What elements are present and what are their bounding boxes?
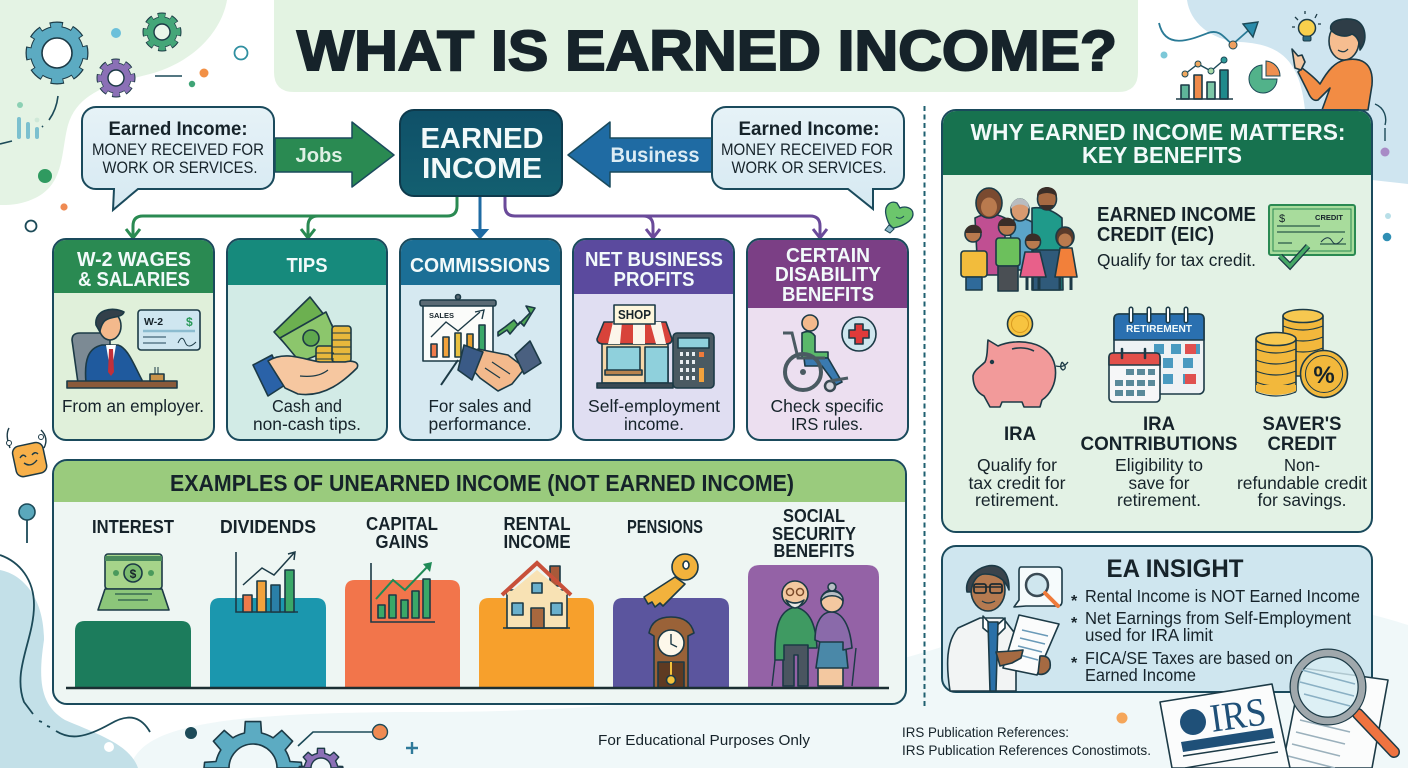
- benefit: saver's credit: CREDIT: [1268, 434, 1337, 455]
- card: commissions: performance.: [428, 414, 532, 434]
- bar: social security: SOCIAL: [783, 506, 845, 526]
- benefit: IRA: retirement.: [975, 490, 1059, 510]
- arrow: business: Business: [610, 144, 700, 167]
- bar: pensions: PENSIONS: [627, 517, 703, 537]
- benefit: saver's credit: [1237, 414, 1367, 510]
- icon: employee at desk: [67, 309, 177, 388]
- card: tips: Cash and: [272, 396, 342, 416]
- callout: right definition: MONEY RECEIVED FOR: [721, 140, 893, 159]
- card: certain disability benefits: Check specific: [770, 396, 884, 416]
- panel: unearned income: [53, 460, 906, 704]
- icon: house: [502, 563, 571, 628]
- bar: interest: INTEREST: [92, 517, 174, 537]
- bullet list: Net Earnings from Self-Employment: [1085, 608, 1351, 628]
- person: [1292, 19, 1372, 110]
- decoration: orange dot: [1116, 712, 1128, 724]
- icon: sales chart and handshake: [420, 294, 541, 391]
- bar: pensions: [613, 517, 729, 688]
- benefit: earned income credit: [1097, 204, 1256, 270]
- benefit: saver's credit: refundable credit: [1237, 473, 1367, 493]
- icon: document behind: [1282, 668, 1388, 768]
- bullet list: Earned Income: [1085, 665, 1196, 685]
- bar: dividends: DIVIDENDS: [220, 517, 316, 537]
- icon: bottom purple gear: [299, 748, 343, 768]
- icon: credit check: CREDIT: [1315, 213, 1343, 222]
- bullet list: *: [1071, 655, 1078, 672]
- heading: WHY EARNED INCOME MATTERS:: [970, 119, 1346, 145]
- illustration: presenter with charts: [1159, 11, 1391, 241]
- benefit: IRA contributions: IRA: [1143, 414, 1175, 435]
- central box: earned income: [400, 110, 562, 196]
- icon: W-2 form: $: [186, 315, 193, 329]
- icon: capital gains chart: [371, 562, 435, 622]
- icon: bottom blue gear: [204, 722, 302, 768]
- bar: rental income: [479, 514, 594, 688]
- card: W-2 wages: [53, 239, 214, 440]
- benefit: IRA: IRA: [1004, 424, 1036, 445]
- benefit: IRA contributions: CONTRIBUTIONS: [1080, 434, 1238, 455]
- icon: tax professional: [948, 566, 1059, 691]
- bar: social security: [748, 506, 879, 688]
- bar: rental income: RENTAL: [504, 514, 570, 534]
- callout: left definition: WORK OR SERVICES.: [102, 158, 258, 177]
- benefit: IRA: [968, 424, 1066, 510]
- card: net business profits: Self-employment: [588, 396, 720, 416]
- card: tips: TIPS: [286, 255, 328, 277]
- card: certain disability benefits: CERTAIN: [786, 245, 870, 267]
- central box: earned income: INCOME: [422, 153, 542, 185]
- icon: medical cross: [842, 317, 876, 351]
- benefit: saver's credit: for savings.: [1258, 490, 1346, 510]
- icon: laptop with money: $: [130, 567, 137, 581]
- footer note: For Educational Purposes Only: [598, 733, 811, 749]
- decorative curve: [0, 555, 150, 736]
- central box: earned income: EARNED: [420, 123, 544, 155]
- icon: elderly couple: [772, 581, 856, 686]
- bullet list: used for IRA limit: [1085, 625, 1213, 645]
- benefit: IRA: tax credit for: [968, 473, 1066, 493]
- bullet list: *: [1071, 593, 1078, 610]
- icon: pie chart: [1249, 61, 1280, 93]
- connectors: purple to profits and disability: [505, 197, 827, 238]
- card: W-2 wages: W-2 WAGES: [77, 249, 191, 271]
- benefit: IRA: Qualify for: [977, 455, 1057, 475]
- icon: light bulb: [1292, 11, 1321, 41]
- icon: trend arrow: [1159, 22, 1258, 58]
- divider: [924, 106, 926, 706]
- footer references: IRS Publication References Conostimots.: [902, 742, 1151, 758]
- icon: credit check: $: [1279, 213, 1285, 225]
- card: W-2 wages: & SALARIES: [78, 269, 190, 291]
- bullet list: [1071, 586, 1360, 685]
- icon: retirement calendar: [1109, 309, 1204, 402]
- card: net business profits: [573, 239, 734, 440]
- footer references: IRS Publication References:: [902, 724, 1069, 740]
- title banner: [274, 0, 1138, 92]
- heading: EA INSIGHT: [1106, 555, 1244, 583]
- benefit: saver's credit: Non-: [1284, 455, 1320, 475]
- callout: right definition: [712, 107, 904, 209]
- card: tips: non-cash tips.: [253, 414, 361, 434]
- bar: capital gains: CAPITAL: [366, 514, 438, 534]
- benefit: IRA contributions: [1080, 414, 1238, 510]
- icon: green gear: [146, 16, 178, 48]
- decorations: left side mascot and line: [0, 428, 418, 768]
- card: net business profits: PROFITS: [614, 269, 694, 291]
- title: WHAT IS EARNED INCOME?: [297, 19, 1117, 83]
- benefit: earned income credit: CREDIT (EIC): [1097, 224, 1214, 246]
- icon: W-2 form: W-2: [144, 316, 163, 328]
- benefit: IRA contributions: Eligibility to: [1115, 455, 1203, 475]
- icon: W-2 form: [138, 310, 200, 350]
- icon: wheelchair user: [783, 315, 848, 391]
- icon: shop: SHOP: [618, 308, 651, 322]
- connector: blue to commissions: [473, 197, 487, 238]
- card: commissions: COMMISSIONS: [410, 255, 550, 277]
- bar: interest: [75, 517, 191, 688]
- panel: why earned income matters: [942, 110, 1372, 532]
- footer references: [902, 724, 1151, 758]
- arrow: jobs: Jobs: [296, 145, 342, 167]
- icon: family: [961, 187, 1077, 291]
- icon: speech bubble with magnifier: [1014, 567, 1062, 607]
- icon: shop: [597, 305, 673, 388]
- icon: green bulb mascot: [885, 202, 913, 233]
- bar: capital gains: GAINS: [376, 532, 428, 552]
- benefit: IRA contributions: save for: [1128, 473, 1190, 493]
- card: certain disability benefits: [747, 239, 908, 440]
- icon: coins with percent: [1256, 310, 1348, 398]
- heading: EXAMPLES OF UNEARNED INCOME (NOT EARNED INCOME): [170, 470, 794, 496]
- card: certain disability benefits: DISABILITY: [775, 264, 882, 286]
- benefit: saver's credit: SAVER'S: [1262, 414, 1342, 435]
- icon: retirement calendar: RETIREMENT: [1126, 324, 1192, 335]
- background blob: bottom left: [0, 570, 138, 768]
- card: net business profits: income.: [624, 414, 684, 434]
- benefit: earned income credit: Qualify for tax credit.: [1097, 250, 1256, 270]
- callout: left definition: MONEY RECEIVED FOR: [92, 140, 264, 159]
- background blob: top left: [0, 0, 227, 205]
- bullet list: Rental Income is NOT Earned Income: [1085, 586, 1360, 606]
- card: commissions: [400, 239, 561, 440]
- callout: left definition: [82, 107, 274, 210]
- bullet list: FICA/SE Taxes are based on: [1085, 648, 1293, 668]
- card: net business profits: NET BUSINESS: [585, 249, 723, 271]
- icon: piggy bank: [973, 312, 1068, 407]
- panel: EA insight: [942, 546, 1372, 692]
- icon: calculator: [673, 333, 714, 388]
- icon: smiling robot: [6, 428, 48, 478]
- bar: capital gains: [345, 514, 460, 688]
- callout: left definition: Earned Income:: [108, 119, 248, 140]
- background wash: bottom: [130, 592, 1408, 768]
- arrow: business: [568, 122, 713, 187]
- bar: social security: BENEFITS: [774, 541, 854, 561]
- bullet list: *: [1071, 615, 1078, 632]
- icon: coins with percent: %: [1313, 362, 1335, 389]
- icon: grandfather clock: [649, 617, 694, 688]
- card: certain disability benefits: IRS rules.: [791, 414, 863, 434]
- icon: pin: [19, 504, 35, 543]
- benefit: earned income credit: EARNED INCOME: [1097, 204, 1256, 226]
- card: certain disability benefits: BENEFITS: [782, 284, 874, 306]
- background blob: top right: [1187, 0, 1408, 184]
- icon: hand with cash and coins: [253, 297, 358, 396]
- icon: credit check: [1269, 205, 1355, 266]
- icon: magnifying glass: [1294, 653, 1394, 752]
- card: tips: [227, 239, 387, 440]
- decorative swirl: [1375, 104, 1386, 141]
- benefit: IRA contributions: retirement.: [1117, 490, 1201, 510]
- arrow: jobs: [275, 122, 394, 187]
- icon: dividends chart: [236, 552, 298, 612]
- icon: IRS form: IRS: [1207, 688, 1269, 741]
- icon: sales chart and handshake: SALES: [429, 311, 454, 320]
- callout: right definition: Earned Income:: [738, 119, 880, 140]
- bar: dividends: [210, 517, 326, 688]
- decorations: top left gears and dots: [0, 16, 248, 232]
- bar: rental income: INCOME: [504, 532, 570, 552]
- panel: why earned income matters: KEY BENEFITS: [1082, 142, 1242, 168]
- icon: key: [644, 554, 698, 607]
- icon: IRS form: [1160, 684, 1290, 768]
- icon: blue gear: [30, 26, 84, 80]
- icon: bar chart: [1176, 57, 1233, 99]
- illustration: IRS documents and magnifier: [1160, 653, 1394, 768]
- icon: laptop with money: [98, 554, 169, 610]
- card: commissions: For sales and: [428, 396, 532, 416]
- bar: social security: SECURITY: [772, 524, 856, 544]
- connectors: green to wages and tips: [126, 197, 457, 238]
- icon: purple gear: [100, 62, 132, 94]
- callout: right definition: WORK OR SERVICES.: [732, 158, 886, 177]
- card: W-2 wages: From an employer.: [62, 396, 204, 416]
